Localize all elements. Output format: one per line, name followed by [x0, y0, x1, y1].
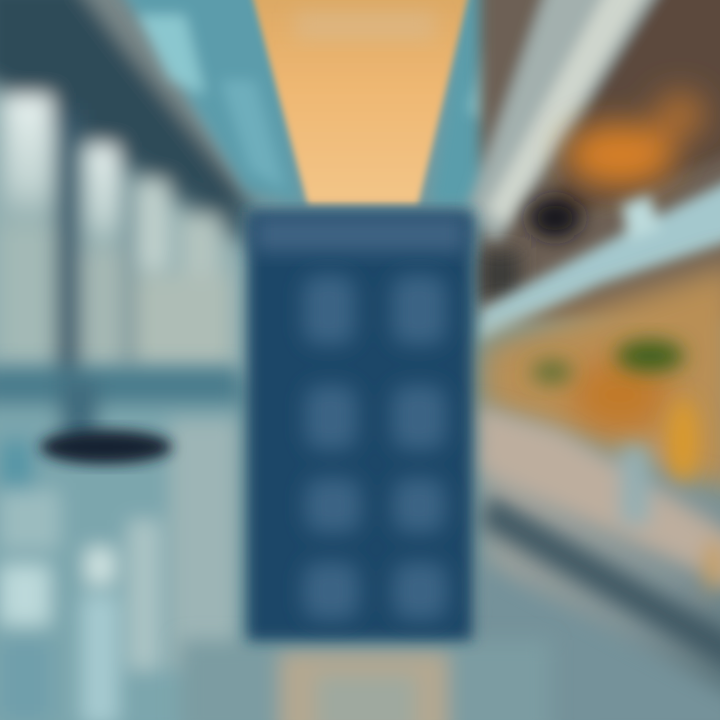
plants	[532, 340, 684, 383]
right floor	[480, 440, 720, 720]
central floor strip	[180, 640, 550, 720]
dark bench	[40, 430, 172, 464]
panel header band	[254, 216, 466, 252]
dark recess	[480, 198, 581, 300]
right side dark ceiling and warm lights	[470, 0, 720, 320]
warm glow upper right	[565, 91, 706, 187]
left hall	[0, 0, 252, 430]
panel grid cells	[303, 275, 447, 620]
light diagonal beam	[480, 175, 720, 342]
orange ceiling panel	[248, 0, 472, 205]
teal ceiling panels	[115, 0, 560, 205]
left water band and floor	[0, 368, 240, 720]
right shop warm zone	[480, 260, 720, 500]
blue central panel	[248, 212, 472, 640]
